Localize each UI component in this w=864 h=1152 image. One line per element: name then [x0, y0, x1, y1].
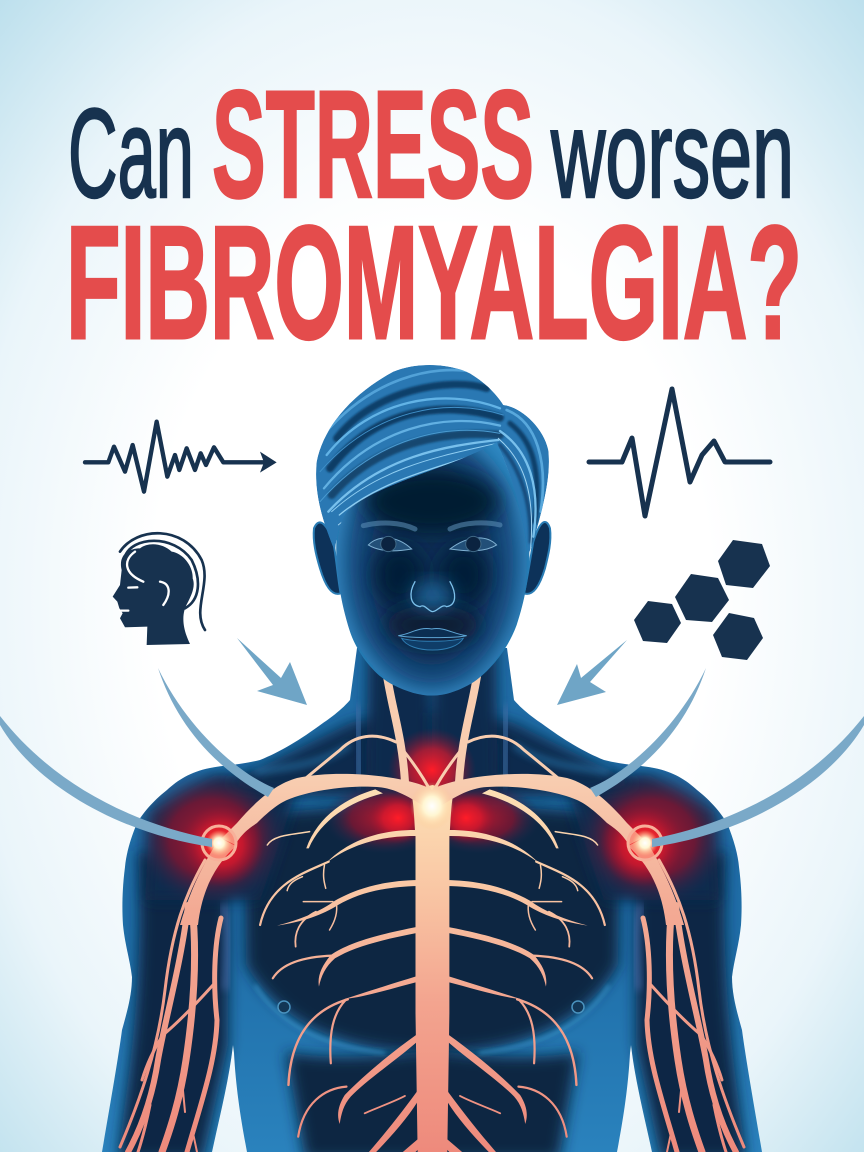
head [314, 365, 550, 702]
body silhouette [90, 640, 780, 1152]
right fine branches [460, 832, 605, 1137]
ears [314, 522, 550, 594]
body shading left [118, 640, 447, 1152]
hair dark bands [330, 384, 537, 542]
icon: ECG line [589, 389, 770, 516]
curved line: inner right [590, 668, 706, 797]
nerve network [120, 670, 744, 1152]
curved line: outer left [0, 716, 212, 847]
nipples [278, 1001, 584, 1013]
title line 1: STRESS: STRESS [212, 59, 534, 230]
icon: pulse wave with arrow [85, 422, 277, 492]
right rib nerves [442, 789, 588, 1152]
body shading right [417, 640, 746, 1152]
left fine branches [260, 832, 405, 1137]
title [66, 59, 802, 373]
curved line: outer right [652, 716, 864, 847]
left rib nerves [277, 789, 423, 1152]
nerves: torso [260, 785, 605, 1152]
central trunk [411, 785, 454, 1152]
lips [398, 629, 467, 650]
hair [316, 365, 549, 555]
glow node: centre [410, 782, 454, 830]
nerves: left arm and clavicle [120, 670, 432, 1152]
icon: hexagon molecules [634, 540, 770, 660]
arrow: right pointing to body [557, 640, 627, 705]
arrow: left pointing to body [237, 638, 307, 705]
figure [90, 365, 780, 1152]
face [336, 442, 530, 696]
nerves: right arm and clavicle [432, 670, 744, 1152]
nose [411, 582, 455, 612]
glow node: right shoulder [628, 826, 662, 860]
title line 1: Can: Can [68, 83, 194, 224]
glow node: left shoulder [202, 826, 236, 860]
neck red glow [390, 730, 474, 802]
curved line: inner left [158, 668, 274, 797]
eyes [368, 536, 497, 552]
hair light strands [320, 370, 543, 548]
eyebrows [363, 523, 500, 529]
icon: head with brain [113, 533, 205, 645]
